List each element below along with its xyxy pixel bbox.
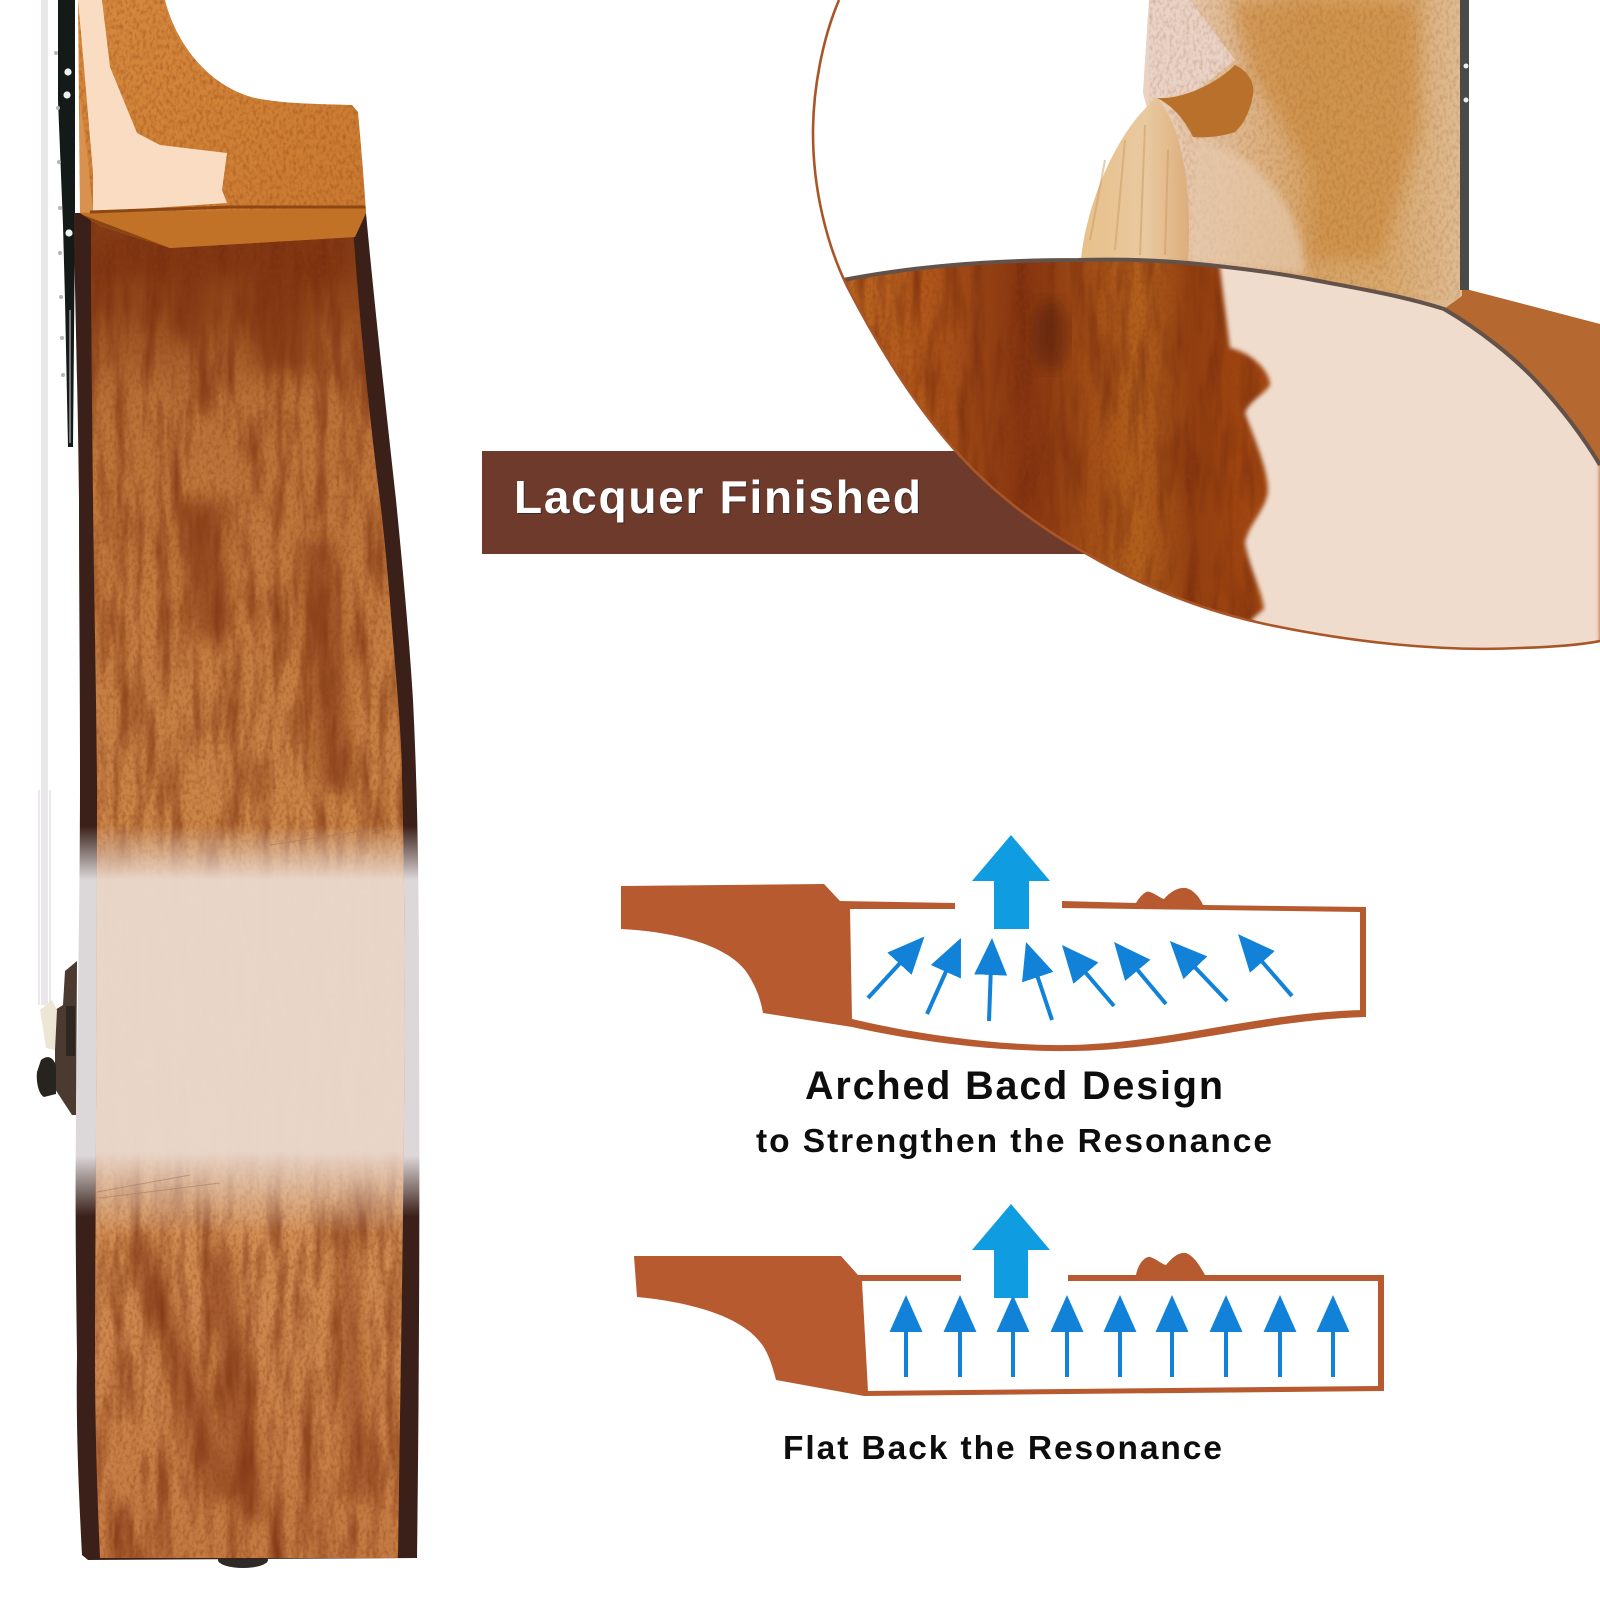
- lens: back curve wood: [1446, 290, 1600, 461]
- caption: flat back: Flat Back the Resonance: [783, 1430, 1222, 1467]
- fretboard: [54, 0, 75, 447]
- subheading: strengthen the resonance: to Strengthen the Resonance: [756, 1123, 1272, 1160]
- dark binding edge: [60, 213, 430, 1563]
- internal resonance arrows: [868, 939, 1292, 1021]
- photo: ukulele side view: [37, 0, 430, 1568]
- label text: Lacquer Finished: [514, 471, 921, 523]
- magnified lens: lacquer detail: [800, 0, 1600, 680]
- neck heel: [70, 0, 370, 250]
- lens: top edge binding: [843, 260, 1600, 465]
- internal resonance arrows: [906, 1301, 1333, 1377]
- large sound arrow: [972, 835, 1050, 929]
- diagram: arched back: [621, 835, 1366, 1051]
- strings: [39, 0, 50, 1005]
- guitar body side: [60, 213, 430, 1563]
- large sound arrow: [972, 1204, 1050, 1298]
- diagram: flat back: [634, 1204, 1384, 1396]
- lens: neck: [1081, 0, 1469, 309]
- heading: arched back design: Arched Bacd Design: [805, 1064, 1223, 1108]
- flat back wood section: [634, 1253, 1384, 1396]
- white burst band: [85, 825, 410, 1235]
- arched back wood section: [621, 884, 1366, 1051]
- koa wood side: [85, 213, 410, 1563]
- lens: top face wood: [846, 262, 1600, 648]
- bridge and tie block: [37, 961, 77, 1115]
- end pin: [218, 1552, 268, 1568]
- lens: outline: [813, 0, 1600, 649]
- label bar: Lacquer Finished: [482, 451, 1122, 554]
